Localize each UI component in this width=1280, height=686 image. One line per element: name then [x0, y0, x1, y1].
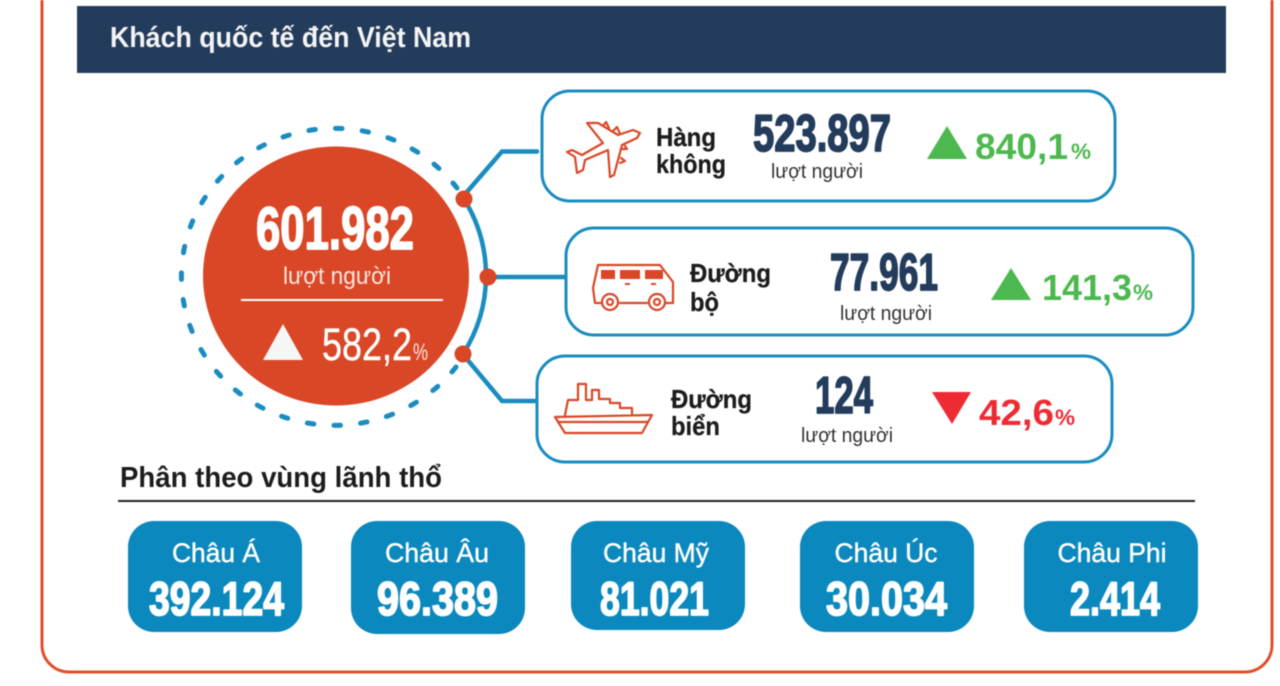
change: 42,6 — [979, 392, 1054, 433]
card: sea: lượt người — [801, 425, 893, 447]
region: America: 81.021 — [600, 572, 709, 625]
card: road: bộ — [690, 287, 719, 317]
divider — [241, 299, 443, 301]
dashed ring around total — [181, 128, 457, 425]
total circle — [203, 146, 469, 406]
total unit: lượt người — [283, 263, 391, 290]
region: Africa — [1024, 521, 1198, 632]
icon: ship — [555, 384, 652, 433]
card: sea — [537, 356, 1112, 462]
region: Oceania — [800, 521, 974, 632]
region: Oceania: Châu Úc — [834, 537, 938, 568]
connectors between total and transport cards — [463, 152, 566, 401]
value: 523.897 — [753, 105, 891, 163]
card: air — [542, 91, 1115, 201]
label: Hàng — [656, 122, 716, 152]
up triangle — [991, 268, 1031, 300]
up triangle — [263, 324, 303, 360]
region: Africa: Châu Phi — [1058, 538, 1166, 568]
card: air: lượt người — [771, 161, 863, 183]
region: America — [571, 521, 745, 630]
up triangle — [927, 126, 967, 159]
label: Đường — [671, 384, 752, 414]
down triangle — [932, 392, 971, 424]
card: sea: biển — [671, 411, 720, 441]
icon: airplane — [567, 122, 640, 177]
heading: title: Khách quốc tế đến Việt Nam — [110, 22, 471, 54]
card: sea: % — [1055, 405, 1075, 430]
region: Asia — [128, 521, 302, 632]
card: air: % — [1071, 139, 1091, 164]
card: air: không — [656, 149, 726, 179]
region: America: Châu Mỹ — [603, 538, 709, 568]
region: Europe — [351, 521, 525, 634]
change: 141,3 — [1042, 267, 1132, 308]
card: road: % — [1133, 280, 1153, 305]
connector dots — [454, 190, 496, 362]
card: road: lượt người — [840, 303, 932, 325]
region: Oceania: 30.034 — [826, 572, 947, 625]
value: 124 — [815, 367, 873, 425]
total circle: % — [413, 339, 428, 366]
region: Asia: Châu Á — [172, 538, 260, 568]
value: 77.961 — [830, 244, 938, 302]
total number: 601.982 — [256, 195, 414, 262]
heading: by region: Phân theo vùng lãnh thổ — [120, 462, 442, 494]
header bar — [77, 6, 1226, 73]
region: Asia: 392.124 — [149, 572, 284, 625]
region: Europe: 96.389 — [377, 572, 498, 625]
change: 840,1 — [975, 126, 1068, 167]
region: Europe: Châu Âu — [385, 537, 489, 568]
card: road — [566, 228, 1193, 335]
label: Đường — [690, 258, 771, 288]
icon: van — [593, 265, 673, 310]
region: Africa: 2.414 — [1070, 572, 1160, 625]
total change: 582,2 — [322, 319, 412, 370]
